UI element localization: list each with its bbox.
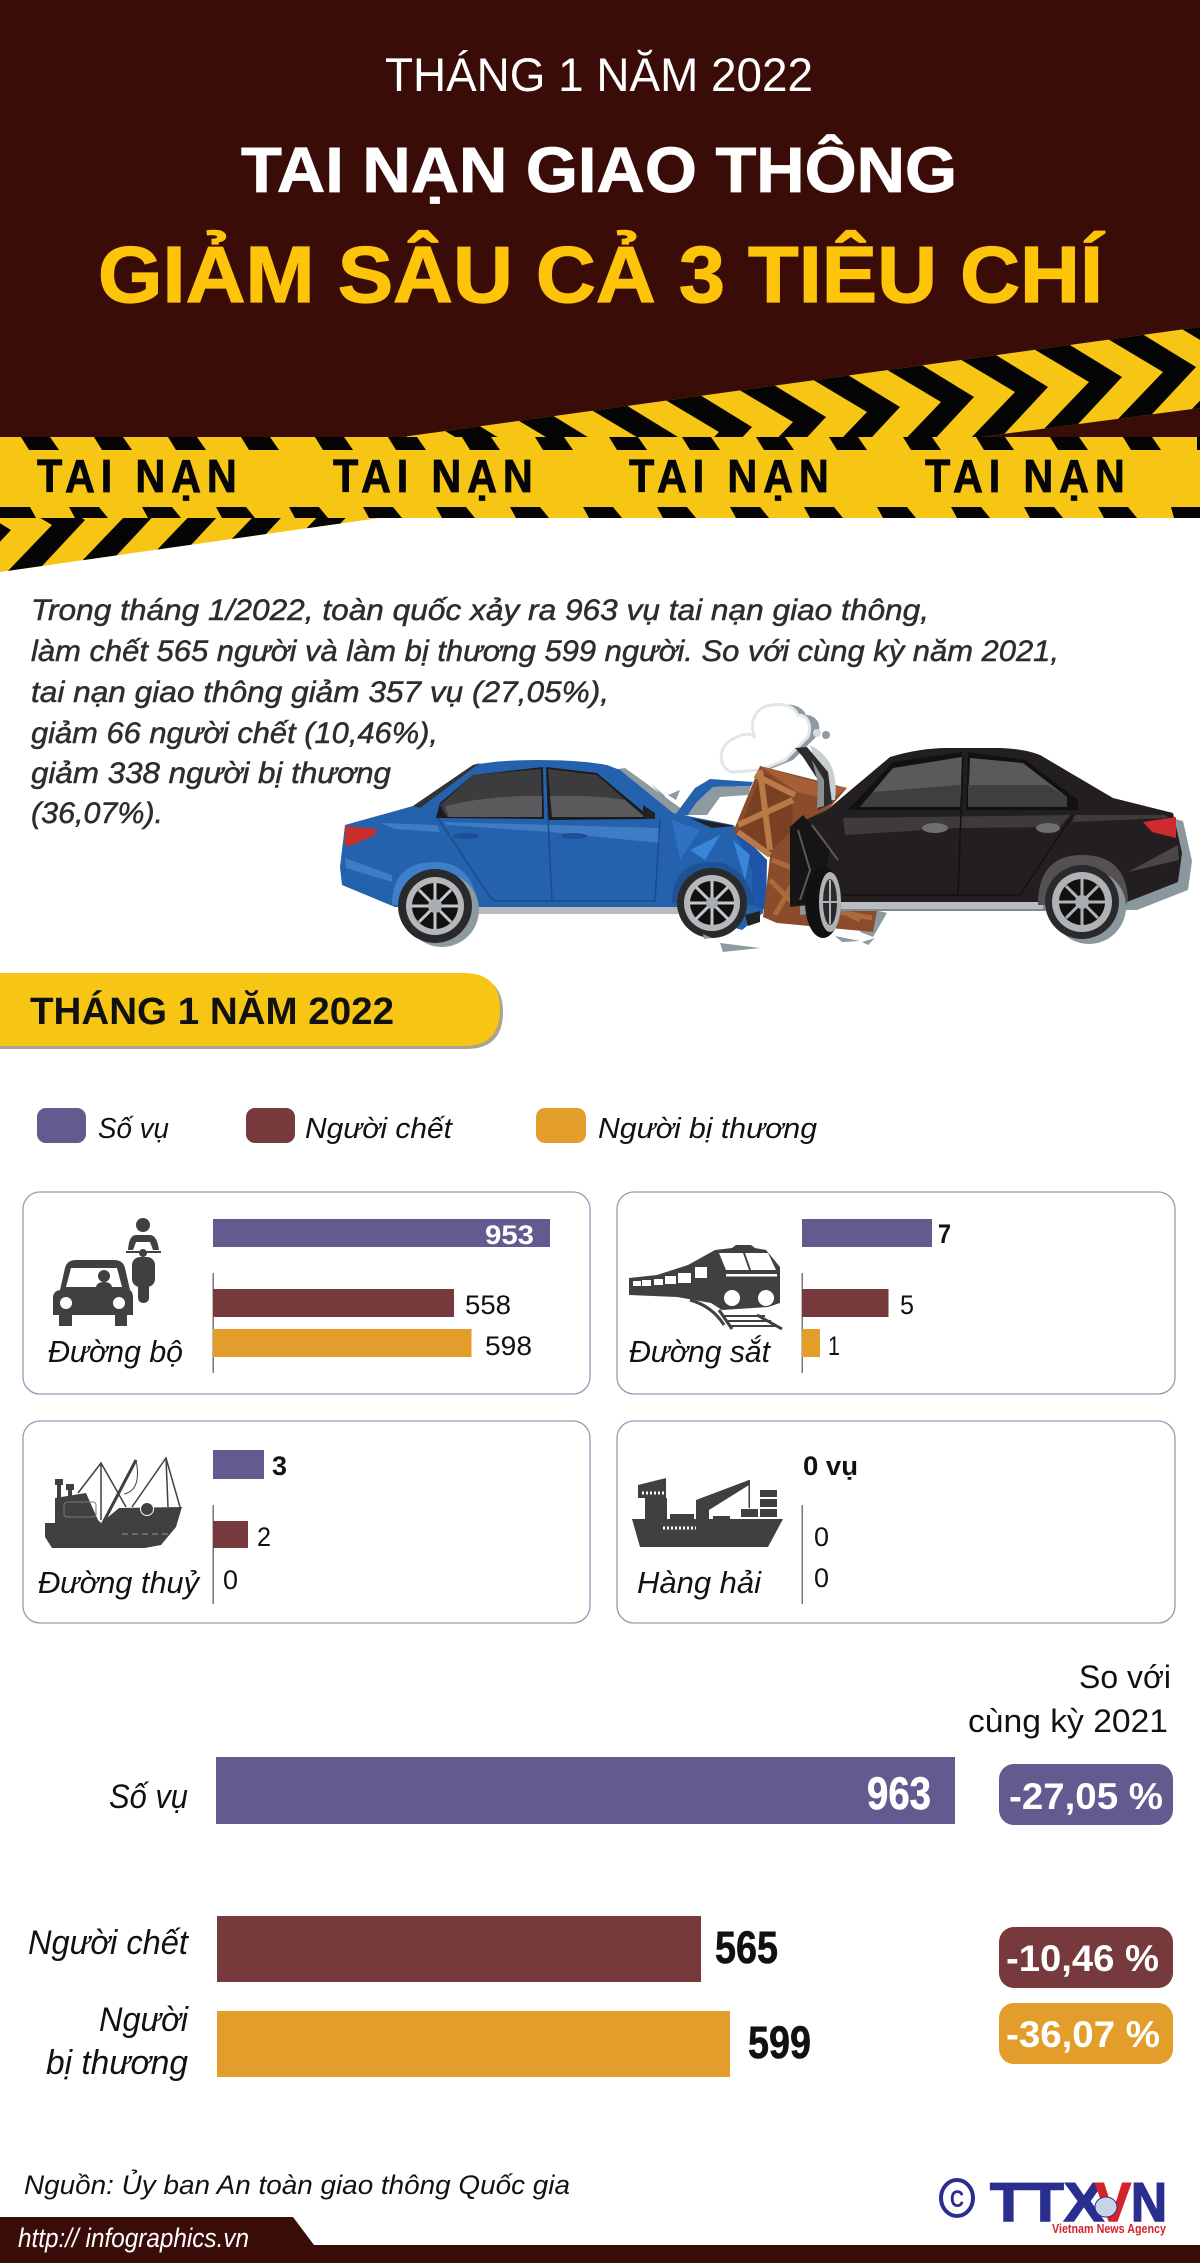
- tape label 1: TAI NẠN: [37, 451, 237, 503]
- value: số vụ 0: 0 vụ: [803, 1451, 858, 1481]
- change pill: người chết: -10,46 %: [1006, 1938, 1159, 1979]
- legend: [37, 1108, 817, 1145]
- subtitle: date: THÁNG 1 NĂM 2022: [385, 48, 813, 101]
- copyright mark: [941, 2180, 973, 2216]
- icon: fishing boat: [45, 1458, 182, 1548]
- front wheel: [805, 866, 841, 938]
- comparison heading: So với: [1079, 1659, 1171, 1695]
- logo: TTXVN: TTX: [990, 2171, 1104, 2233]
- legend: người bị thương: Người bị thương: [598, 1113, 817, 1145]
- summary bar: người bị thương: Người: [99, 2001, 189, 2039]
- main hazard band: [0, 437, 1200, 518]
- bar: người chết 5: [802, 1289, 914, 1320]
- bar: số vụ 7: [802, 1219, 951, 1249]
- section heading pill: [0, 973, 503, 1049]
- label: Hàng hải: [637, 1565, 762, 1600]
- bar: người chết 2: [213, 1521, 271, 1552]
- axis: [802, 1505, 803, 1604]
- bar: số vụ 953: [213, 1219, 550, 1250]
- panel: đường thuỷ: [23, 1421, 590, 1623]
- bar: người chết 5: 5: [900, 1290, 914, 1320]
- legend: người chết: Người chết: [305, 1113, 454, 1145]
- logo: TTXVN: [941, 2171, 1167, 2236]
- value: bị thương 0: 0: [223, 1565, 238, 1595]
- footer bar: [0, 2217, 1200, 2263]
- value: người chết 0: 0: [814, 1522, 829, 1552]
- legend: người chết: [246, 1108, 454, 1145]
- black car: [790, 745, 1192, 944]
- bar: số vụ 3: 3: [272, 1451, 287, 1481]
- bar: bị thương 598: 598: [485, 1331, 532, 1361]
- panel: hàng hải: [617, 1421, 1175, 1623]
- raised hood: [810, 745, 836, 800]
- source: Nguồn: Ủy ban An toàn giao thông Quốc gia: [24, 2167, 570, 2200]
- logo: TTXVN: V: [1095, 2171, 1131, 2233]
- bar: bị thương 1: [802, 1329, 840, 1361]
- sill: [830, 907, 1046, 911]
- legend: số vụ: Số vụ: [98, 1113, 169, 1145]
- intro paragraph: tai nạn giao thông giảm 357 vụ (27,05%),: [31, 676, 609, 709]
- crumpled hood: [675, 779, 753, 815]
- tape label 2: TAI NẠN: [333, 451, 533, 503]
- legend: người bị thương: [536, 1108, 817, 1145]
- globe: [1095, 2197, 1117, 2217]
- footer bar: http:// infographics.vn: [18, 2223, 249, 2253]
- axis: [212, 1273, 214, 1373]
- summary bar: số vụ: 963: [867, 1768, 931, 1819]
- intro paragraph: [31, 594, 1059, 830]
- diagonal hazard tape: lower left: [0, 518, 379, 572]
- summary bar: người bị thương: 599: [748, 2017, 811, 2068]
- panel: đường sắt: [617, 1192, 1175, 1394]
- intro paragraph: giảm 338 người bị thương: [31, 757, 391, 790]
- change pill: người bị thương: [999, 2003, 1173, 2064]
- wooden crate: [733, 766, 887, 937]
- body: [340, 760, 767, 930]
- axis: [802, 1273, 803, 1373]
- axis: [212, 1505, 214, 1604]
- crumple: [790, 815, 830, 905]
- rear wheel: [1038, 855, 1128, 944]
- comparison heading: cùng kỳ 2021: [968, 1703, 1168, 1739]
- diagonal hazard tape: upper right: [402, 327, 1200, 437]
- section heading pill: THÁNG 1 NĂM 2022: [30, 989, 394, 1033]
- tape label 3: TAI NẠN: [629, 451, 829, 503]
- change pill: số vụ: -27,05 %: [1009, 1776, 1163, 1817]
- summary bar: số vụ: [109, 1757, 955, 1824]
- summary bar: người bị thương: bị thương: [46, 2044, 188, 2082]
- header background: [0, 0, 1200, 437]
- title block: [98, 48, 1105, 319]
- summary bar: người chết: 565: [715, 1922, 778, 1973]
- debris: [650, 783, 875, 952]
- tape label 4: TAI NẠN: [925, 451, 1125, 503]
- summary bar: người chết: [28, 1916, 778, 1982]
- bar: bị thương 598: [213, 1329, 532, 1361]
- illustration: car crash: [340, 704, 1192, 952]
- windows: [848, 752, 962, 810]
- intro paragraph: Trong tháng 1/2022, toàn quốc xảy ra 963 vụ tai nạn giao thông,: [31, 594, 929, 627]
- smoke: [721, 704, 830, 772]
- change pill: người bị thương: -36,07 %: [1006, 2014, 1160, 2055]
- title line 1: TAI NẠN GIAO THÔNG: [241, 133, 957, 206]
- intro paragraph: làm chết 565 người và làm bị thương 599 người. So với cùng kỳ năm 2021,: [31, 635, 1059, 668]
- tail light: [345, 826, 377, 846]
- summary bar: người chết: Người chết: [28, 1924, 189, 1962]
- comparison heading: [968, 1659, 1171, 1739]
- label: Đường sắt: [629, 1334, 771, 1369]
- change pill: số vụ: [999, 1764, 1173, 1825]
- bar: bị thương 1: 1: [828, 1331, 840, 1361]
- windows: [436, 767, 544, 819]
- legend: số vụ: [37, 1108, 169, 1145]
- copyright mark: C: [950, 2186, 964, 2213]
- door lines: [438, 818, 660, 901]
- bar: người chết 2: 2: [257, 1522, 271, 1552]
- bar: số vụ 953: 953: [485, 1220, 534, 1250]
- tail light: [1143, 817, 1176, 838]
- bar: số vụ 3: [213, 1450, 287, 1481]
- body: [790, 748, 1182, 907]
- blue car: [340, 760, 767, 947]
- panel: đường bộ: [23, 1192, 590, 1394]
- intro paragraph: giảm 66 người chết (10,46%),: [31, 717, 438, 750]
- icon: train: [629, 1245, 782, 1329]
- icon: car and motorbike: [53, 1218, 161, 1326]
- summary bar: người bị thương: [46, 2001, 811, 2082]
- bar: số vụ 7: 7: [938, 1219, 951, 1249]
- sill: [473, 907, 678, 914]
- label: Đường bộ: [48, 1334, 183, 1369]
- label: Đường thuỷ: [38, 1565, 201, 1600]
- front wheel: [672, 862, 755, 938]
- change pill: người chết: [999, 1927, 1173, 1988]
- logo: TTXVN: Vietnam News Agency: [1052, 2221, 1167, 2236]
- logo: TTXVN: N: [1131, 2171, 1167, 2233]
- rear wheel: [392, 862, 479, 947]
- value: bị thương 0: 0: [814, 1563, 829, 1593]
- title line 2: GIẢM SÂU CẢ 3 TIÊU CHÍ: [98, 230, 1105, 319]
- bar: người chết 558: 558: [465, 1290, 511, 1320]
- icon: cargo ship: [632, 1478, 783, 1547]
- summary bar: số vụ: Số vụ: [109, 1778, 188, 1816]
- bar: người chết 558: [213, 1289, 511, 1320]
- intro paragraph: (36,07%).: [31, 797, 163, 830]
